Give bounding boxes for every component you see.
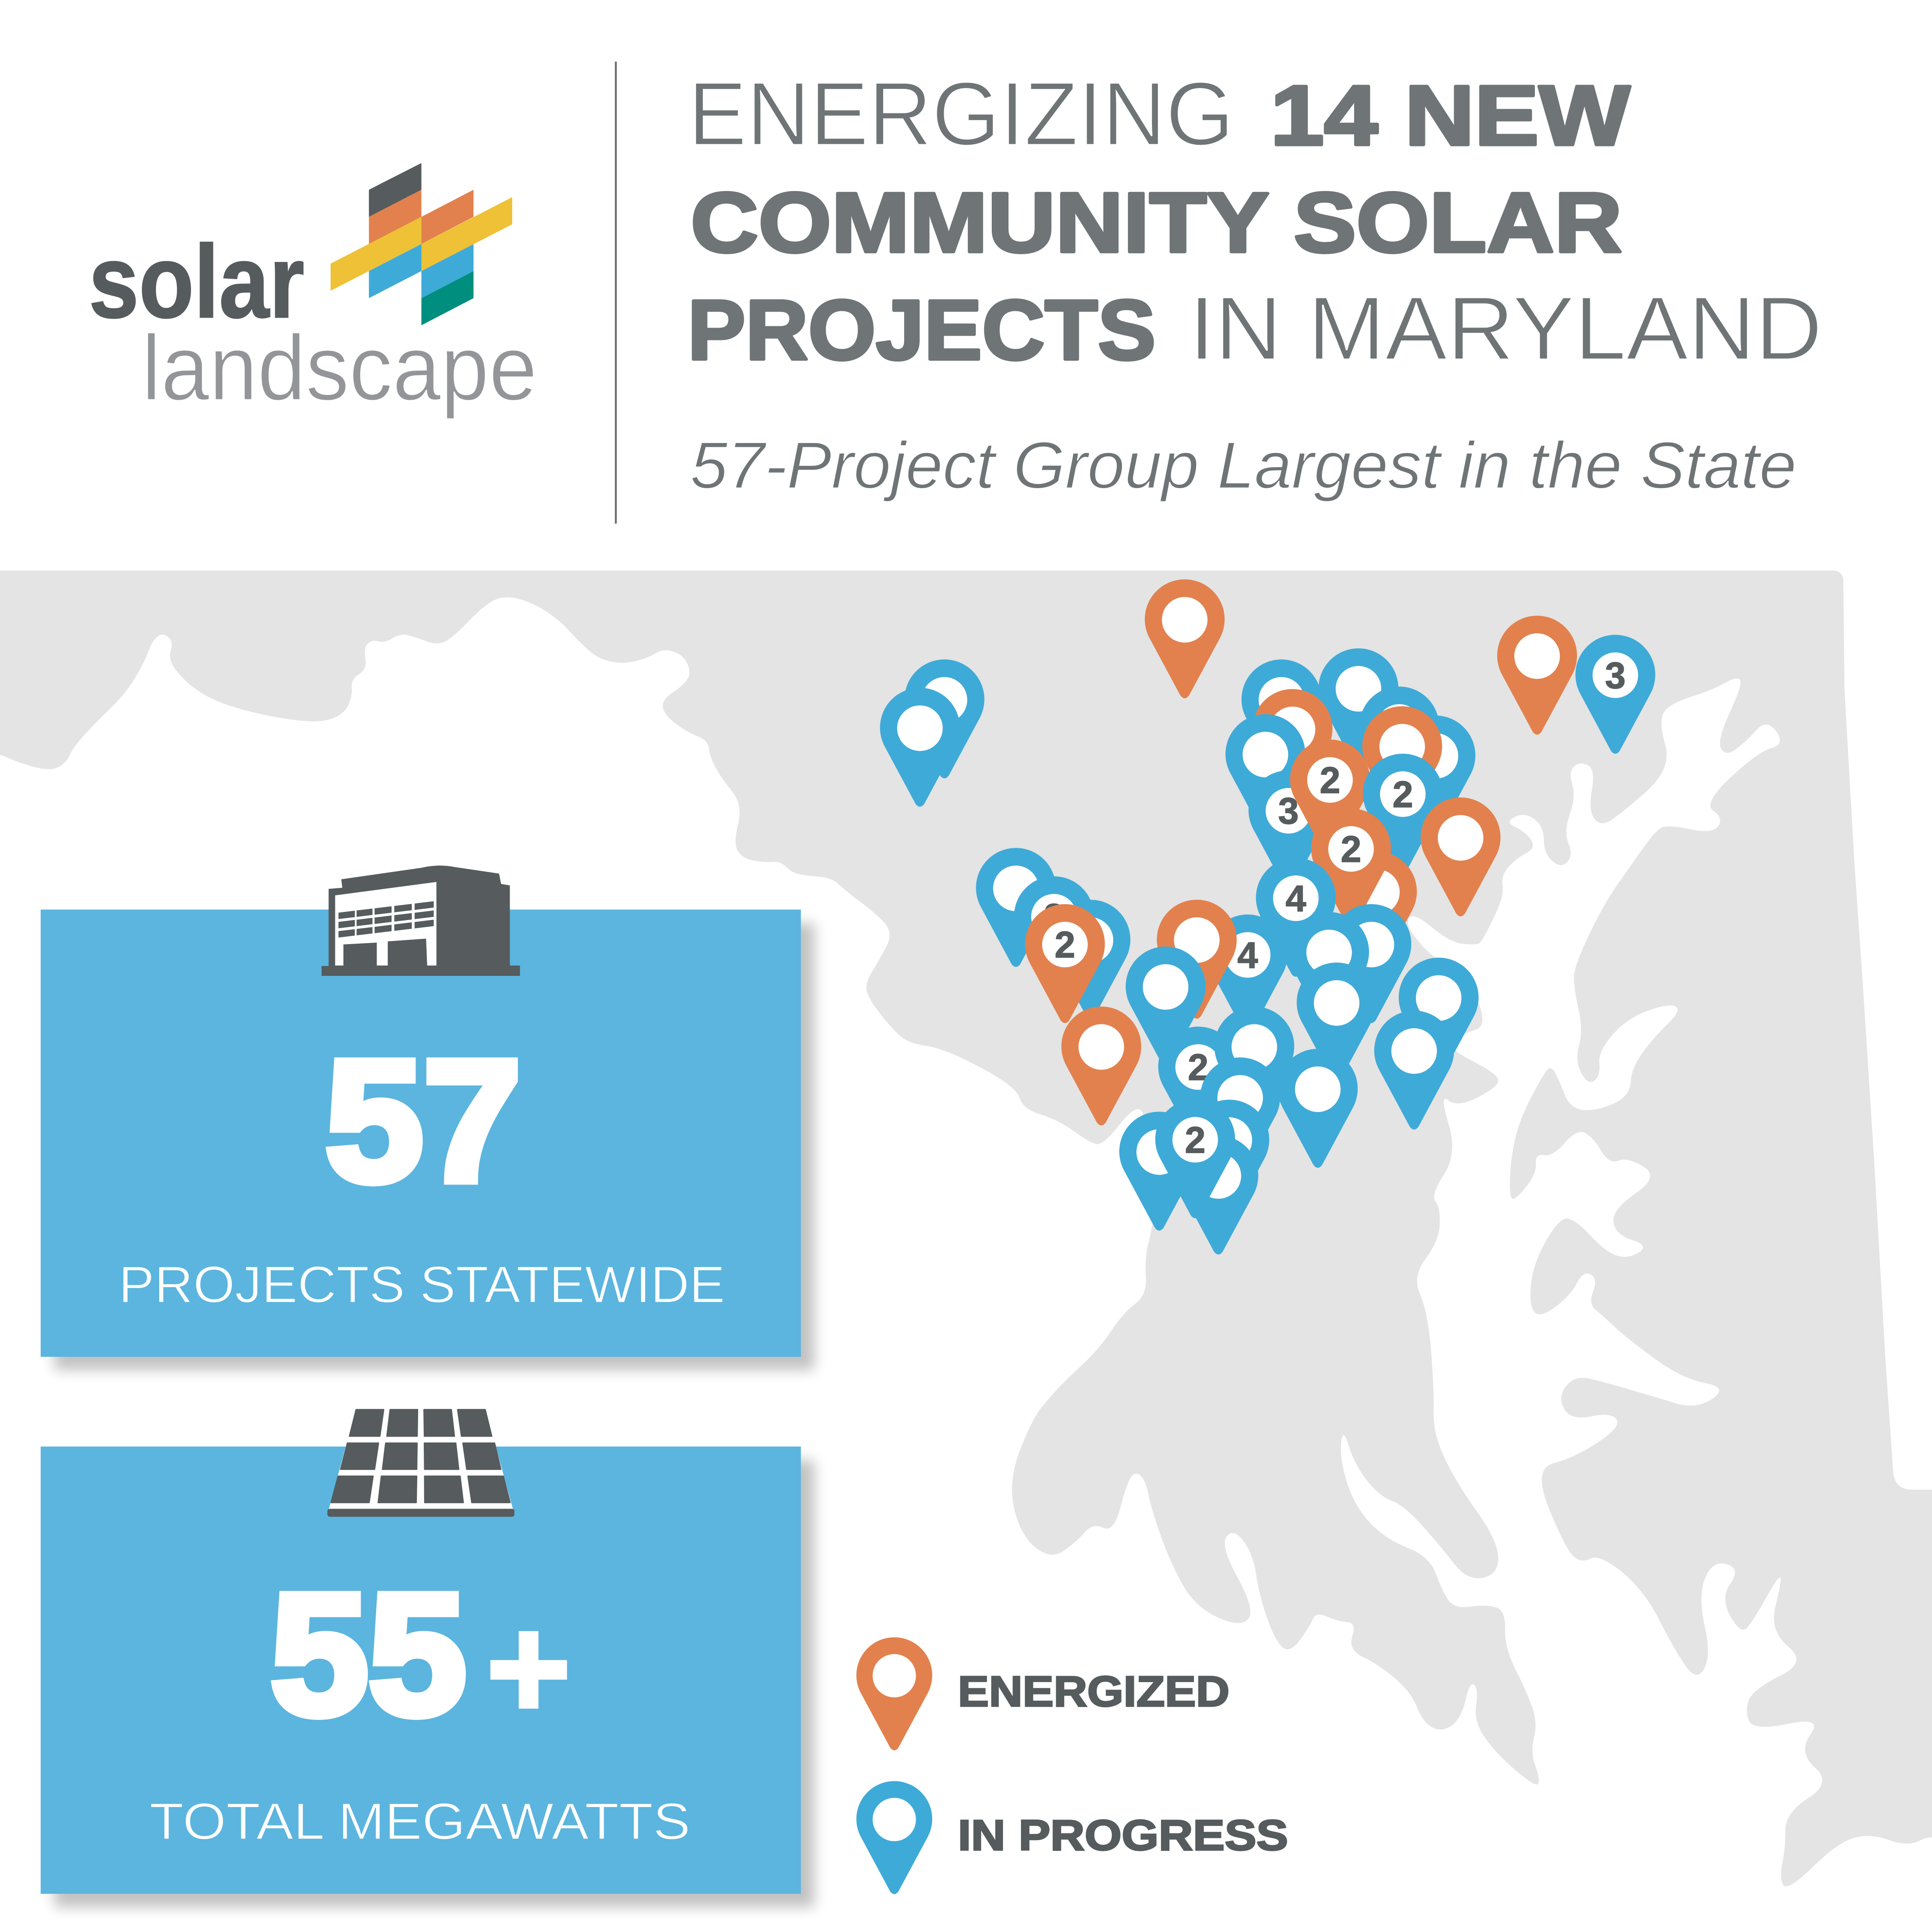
stat label: projects statewide: PROJECTS STATEWIDE [118,1255,725,1313]
pin: in progress [1126,947,1206,1066]
pin: in progress, 3 projects: 3 [1605,655,1625,696]
pin: in progress [1359,687,1439,805]
pin: in progress, 3 projects [1575,635,1655,754]
stat number: 55+ [270,1558,571,1751]
pin: in progress, 2 projects: 2 [1188,1047,1209,1088]
title: IN MARYLAND [1189,278,1823,379]
pin: in progress, 2 projects [1158,1027,1238,1145]
pin: in progress [1225,714,1305,833]
pin: energized [1337,852,1417,971]
pin: in progress, partly hidden number: 2 [1044,896,1064,938]
pin: in progress, 2 projects: 2 [1185,1120,1206,1161]
pin: in progress [1242,659,1321,778]
subtitle: 57-Project Group Largest in the State [690,428,1796,502]
title: 14 NEW [1270,68,1630,163]
pin: in progress, 2 projects: 2 [1392,774,1413,815]
pin: energized [1157,900,1237,1019]
logo: solar landscape [89,163,537,419]
pin: energized [1362,706,1442,825]
pin: in progress [1399,957,1479,1077]
pin: in progress, 3 projects [1249,770,1328,889]
pin: in progress [1119,1112,1199,1230]
header divider [615,61,617,524]
panel: 57 projects statewide [41,866,814,1370]
pin: in progress [1215,1006,1294,1126]
legend label: in progress: IN PROGRESS [958,1811,1288,1859]
pin: in progress [1395,716,1475,835]
logo word: landscape: landscape [142,316,537,419]
stat number: 57: 57 [325,1024,521,1217]
title [687,64,1823,379]
logo word: solar: solar [89,224,304,340]
stat number: 55+: 55 [270,1558,466,1751]
pin: in progress [1278,1049,1358,1168]
pin: in progress [1374,1011,1454,1130]
icon: solar panel [328,1409,514,1517]
legend pin: in progress [857,1781,932,1894]
pin: in progress [1189,1100,1269,1218]
legend label: energized: ENERGIZED [958,1668,1230,1716]
pin: in progress, 4 projects: 4 [1237,935,1258,976]
title: PROJECTS [687,283,1156,377]
map pins [880,579,1655,1255]
pin: energized, 2 projects: 2 [1320,760,1340,801]
pin: energized, 2 projects: 2 [1055,924,1075,966]
legend pin: energized [857,1637,932,1750]
title: ENERGIZING [688,64,1234,164]
pin: in progress [1179,1136,1258,1255]
pin: energized, 2 projects [1290,739,1370,859]
logo mark [331,163,512,325]
pin: energized [1497,616,1577,735]
pin: in progress, 3 projects: 3 [1278,791,1299,832]
map of Maryland [0,571,1932,1886]
icon: building [322,866,520,976]
pin: energized, 2 projects: 2 [1341,829,1361,870]
pin: energized [1421,797,1501,916]
pin: in progress [1297,963,1376,1081]
pin: in progress [976,848,1056,967]
stat label: total megawatts: TOTAL MEGAWATTS [149,1792,690,1850]
pin: in progress, 2 projects [1155,1099,1235,1218]
pin: in progress [1200,1057,1280,1176]
pin: in progress [1289,912,1369,1031]
pin: in progress, 4 projects [1256,858,1336,977]
pin: in progress, 4 projects [1208,914,1288,1033]
pin: in progress [905,659,984,778]
pin: energized [1061,1006,1141,1126]
title: COMMUNITY SOLAR [691,175,1622,270]
pin: in progress, 2 projects [1363,753,1443,873]
pin: energized, 2 projects [1025,904,1105,1023]
stat number: 55+: + [486,1586,571,1749]
pin: in progress [1051,900,1130,1019]
pin: in progress [1318,648,1398,767]
pin: energized, 2 projects [1311,808,1391,927]
panel: 55+ total megawatts [41,1409,814,1908]
pin: in progress [1331,904,1411,1023]
legend [857,1637,1288,1894]
pin: energized [1145,579,1224,699]
pin: in progress, 4 projects: 4 [1285,878,1306,919]
pin: in progress [880,688,960,807]
pin: energized [1253,689,1333,808]
pin: in progress, partly hidden number [1014,876,1094,995]
